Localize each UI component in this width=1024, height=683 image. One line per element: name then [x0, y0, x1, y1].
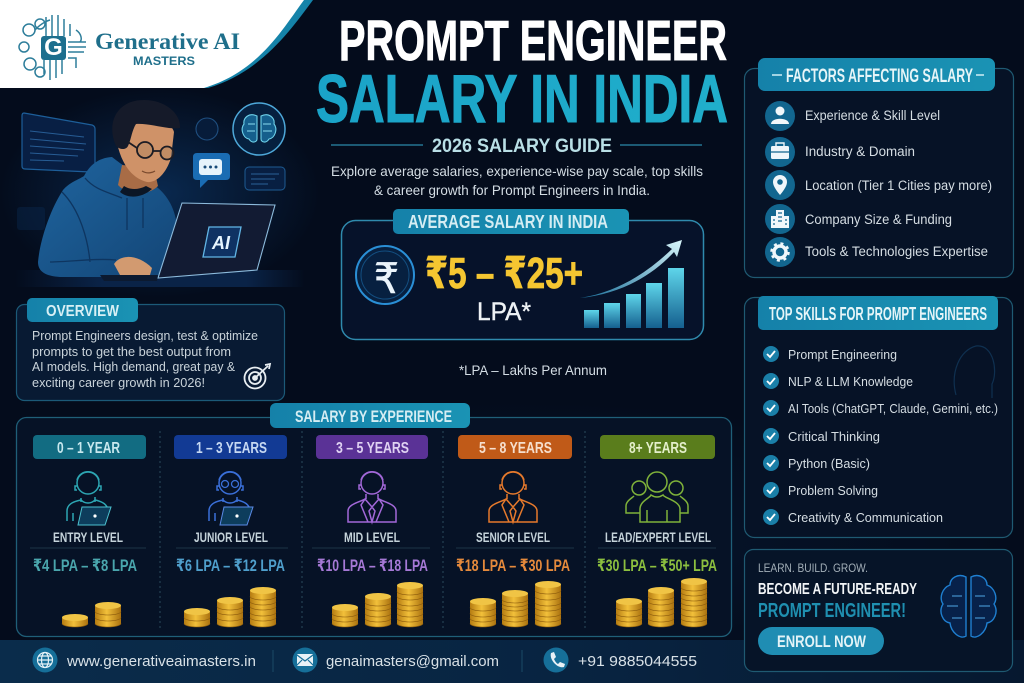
icon: rupee coin: [356, 246, 414, 304]
column: 0-1 year: ENTRY LEVEL: [53, 529, 123, 545]
skills list: Critical Thinking: [788, 429, 880, 444]
column: 5-8 years: 5 – 8 YEARS: [479, 440, 552, 457]
logo wordmark: [95, 29, 240, 68]
illustration: engineer with laptop: [15, 100, 305, 287]
logo wordmark: Generative AI: [95, 29, 240, 54]
intro text: & career growth for Prompt Engineers in India.: [374, 182, 650, 198]
panel: call to action: [744, 550, 1012, 672]
header logo banner: [0, 0, 313, 88]
salary range: ₹5 – ₹25+: [425, 249, 583, 298]
website: www.generativeaimasters.in: [66, 653, 256, 670]
factor: company: [765, 204, 952, 234]
skills list: [763, 346, 998, 525]
LPA footnote: *LPA – Lakhs Per Annum: [459, 362, 607, 378]
column: 5-8 years: ₹18 LPA – ₹30 LPA: [456, 556, 570, 575]
column: 3-5 years: MID LEVEL: [344, 529, 400, 545]
floating code panel: [22, 113, 95, 172]
overview text: prompts to get the best output from: [32, 345, 231, 359]
skills list: Creativity & Communication: [788, 510, 943, 525]
overview text: [32, 329, 258, 390]
column: 8+ years: LEAD/EXPERT LEVEL: [605, 529, 711, 545]
factor: location: Location (Tier 1 Cities pay more): [805, 178, 992, 193]
skills list: Prompt Engineering: [788, 347, 897, 362]
column: 3-5 years: ₹10 LPA – ₹18 LPA: [317, 556, 428, 575]
column: 0-1 year: [30, 435, 146, 627]
logo wordmark: MASTERS: [133, 54, 195, 68]
hoodie details: [50, 178, 143, 262]
cta heading: PROMPT ENGINEER!: [758, 600, 906, 622]
panel: factors affecting salary: [744, 58, 1014, 278]
growth arrow: [580, 240, 682, 298]
factor: company: Company Size & Funding: [805, 212, 952, 227]
icon: circuit brain logo: [19, 15, 86, 80]
title: PROMPT ENGINEER: [339, 9, 727, 73]
column: 0-1 year: ₹4 LPA – ₹8 LPA: [33, 556, 137, 575]
panel: average salary: [342, 209, 704, 340]
faint head watermark: [954, 346, 995, 398]
column: 5-8 years: SENIOR LEVEL: [476, 529, 550, 545]
phone: +91 9885044555: [578, 653, 697, 670]
overview heading: OVERVIEW: [46, 303, 120, 320]
footer contact bar: [0, 640, 1024, 683]
column: 8+ years: [597, 435, 717, 627]
panel: salary by experience: [16, 403, 732, 636]
icon: target: [244, 364, 270, 388]
note panel: [245, 167, 285, 190]
email: genaimasters@gmail.com: [326, 653, 499, 670]
enroll button: ENROLL NOW: [777, 632, 867, 651]
hand: [114, 257, 152, 275]
skills list: NLP & LLM Knowledge: [788, 374, 913, 389]
heading tag: [270, 403, 470, 428]
factor: tools: [765, 237, 988, 267]
icon: chat bubble: [193, 153, 230, 188]
title: [316, 9, 728, 137]
small circle icon: [196, 118, 218, 140]
email: [292, 648, 499, 672]
factor: industry: [765, 137, 915, 167]
column: 5-8 years: [456, 435, 574, 627]
title: SALARY IN INDIA: [316, 61, 728, 137]
cta heading: BECOME A FUTURE-READY: [758, 581, 917, 598]
panel: overview: [16, 298, 284, 400]
column: 1-3 years: JUNIOR LEVEL: [194, 529, 268, 545]
phone: [544, 648, 697, 672]
intro text: Explore average salaries, experience-wise pay scale, top skills: [331, 163, 703, 179]
overview text: Prompt Engineers design, test & optimize: [32, 329, 258, 343]
growth bars: [584, 268, 684, 328]
faint side panel: [17, 207, 45, 230]
website: [32, 648, 256, 672]
person hoodie: [38, 157, 177, 277]
column: 3-5 years: 3 – 5 YEARS: [336, 440, 409, 457]
LPA label: LPA*: [477, 298, 531, 326]
column: 1-3 years: ₹6 LPA – ₹12 LPA: [176, 556, 285, 575]
tagline: LEARN. BUILD. GROW.: [758, 561, 868, 575]
column: 1-3 years: 1 – 3 YEARS: [196, 440, 267, 457]
skills list: Problem Solving: [788, 483, 878, 498]
column: 8+ years: ₹30 LPA – ₹50+ LPA: [597, 556, 717, 575]
column: 1-3 years: [174, 435, 288, 627]
overview text: exciting career growth in 2026!: [32, 376, 205, 390]
factor: industry: Industry & Domain: [805, 144, 915, 159]
skills list: AI Tools (ChatGPT, Claude, Gemini, etc.): [788, 401, 998, 416]
column: 8+ years: 8+ YEARS: [629, 440, 687, 457]
heading tag: [758, 296, 998, 330]
overview heading: [27, 298, 138, 322]
factor: location: [765, 170, 992, 200]
icon: brain circle: [233, 103, 285, 155]
overview text: AI models. High demand, great pay &: [32, 360, 236, 374]
factor: tools: Tools & Technologies Expertise: [805, 244, 988, 259]
cta heading: [758, 581, 917, 622]
intro text: [331, 163, 703, 198]
column: 3-5 years: [312, 435, 430, 627]
enroll button: [758, 627, 884, 655]
laptop: [100, 203, 275, 281]
laptop: AI: [211, 233, 231, 253]
skills list: Python (Basic): [788, 456, 870, 471]
heading tag: SALARY BY EXPERIENCE: [295, 407, 452, 426]
heading tag: [758, 58, 995, 91]
icon: circuit brain logo: G: [44, 34, 63, 61]
factor: experience: Experience & Skill Level: [805, 108, 940, 123]
subtitle: 2026 salary guide: 2026 SALARY GUIDE: [432, 135, 612, 157]
heading tag: AVERAGE SALARY IN INDIA: [408, 211, 608, 232]
desk: [15, 270, 305, 287]
column: 0-1 year: 0 – 1 YEAR: [57, 440, 120, 457]
icon: brain: [941, 576, 996, 637]
panel: top skills: [744, 296, 1012, 538]
factor: experience: [765, 101, 940, 131]
person neck and face: [112, 100, 180, 197]
icon: rupee coin: ₹: [374, 255, 399, 302]
